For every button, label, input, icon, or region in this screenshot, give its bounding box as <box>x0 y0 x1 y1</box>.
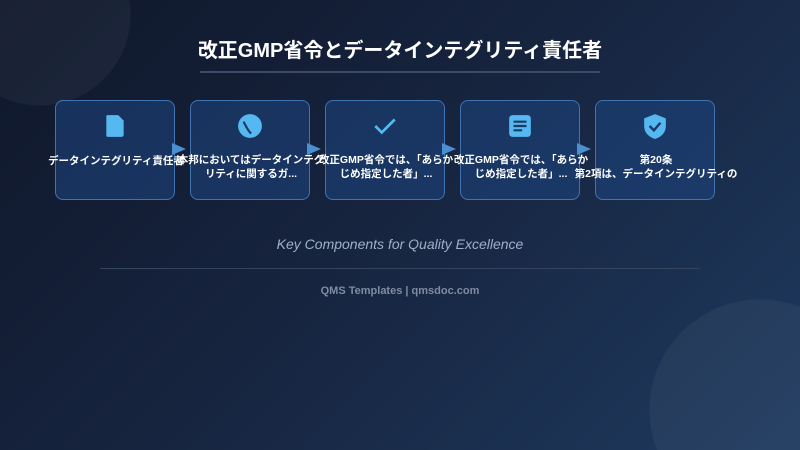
text: 第2項は、データインテグリティの <box>575 168 737 180</box>
text: データインテグリティ責任者 <box>48 155 184 167</box>
step 2 <box>190 100 310 200</box>
icon: shield <box>644 114 666 139</box>
text: 第20条 <box>640 154 672 166</box>
text: 本邦においてはデータインテグ <box>178 154 324 166</box>
text: リティに関するガ... <box>205 168 297 180</box>
text <box>454 154 588 180</box>
icon: document <box>106 115 124 137</box>
icon: list <box>509 115 531 137</box>
step 4 <box>460 100 580 200</box>
text <box>574 154 737 180</box>
text: じめ指定した者」... <box>340 168 432 180</box>
arrow 1 <box>172 143 186 155</box>
arrow 3 <box>442 143 456 155</box>
step 3 <box>325 100 445 200</box>
text: 改正GMP省令では、「あらか <box>319 154 453 166</box>
text: じめ指定した者」... <box>475 168 567 180</box>
subtitle: Key Components for Quality Excellence <box>277 236 523 252</box>
step 1 <box>55 100 175 200</box>
icon: globe <box>238 114 262 138</box>
arrow 4 <box>577 143 591 155</box>
footer: QMS Templates | qmsdoc.com <box>321 285 479 297</box>
arrow 2 <box>307 143 321 155</box>
text <box>319 154 453 180</box>
text: 改正GMP省令では、「あらか <box>454 154 588 166</box>
title: 改正GMP省令とデータインテグリティ責任者 <box>198 40 602 62</box>
icon: check <box>374 118 396 134</box>
text <box>178 154 324 180</box>
step 5 <box>595 100 715 200</box>
